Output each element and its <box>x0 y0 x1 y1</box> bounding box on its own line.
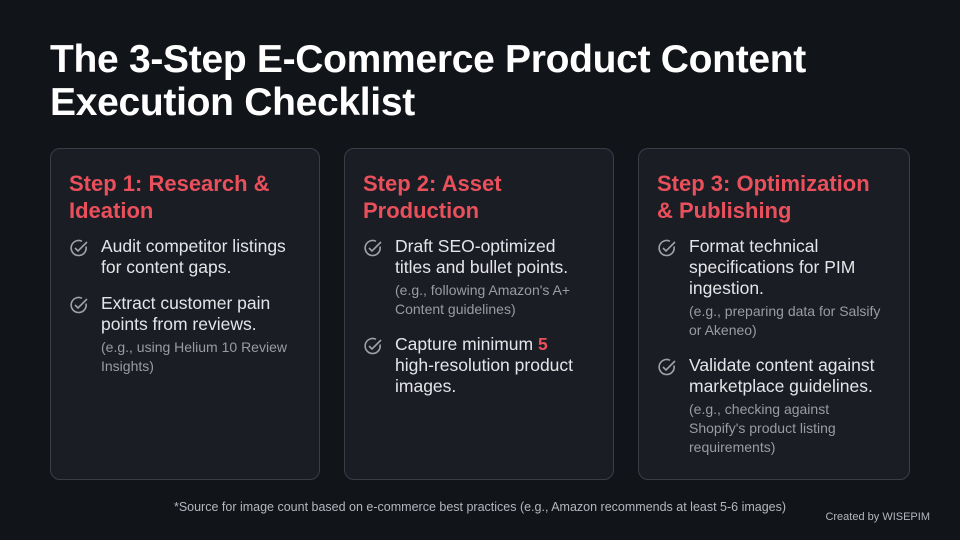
item: draft: (e.g., following Amazon's A+ Content guidelines) <box>395 282 570 317</box>
heading: step 2: Step 2: Asset <box>363 171 502 196</box>
item: extract: (e.g., using Helium 10 Review Insights) <box>101 339 287 374</box>
item: capture <box>364 334 573 396</box>
item: audit: Audit competitor listings for content gaps. <box>101 236 286 277</box>
heading: step 2: Production <box>363 198 479 223</box>
item: validate: Shopify's product listing requirements) <box>689 420 836 455</box>
item: format: Format technical specifications for PIM ingestion. <box>689 236 855 298</box>
heading: step 1: Ideation <box>69 198 153 223</box>
title: The 3-Step E-Commerce Product Content <box>50 38 806 81</box>
item: validate <box>658 355 875 455</box>
heading: step 3 <box>657 171 870 223</box>
item: draft: Draft SEO-optimized <box>395 236 555 256</box>
heading: step 3: & Publishing <box>657 198 791 223</box>
heading: step 2 <box>363 171 502 223</box>
title: Execution Checklist <box>50 81 415 124</box>
item: format: (e.g., preparing data for Salsify or Akeneo) <box>689 303 880 338</box>
item: extract: Extract customer pain points from reviews. <box>101 293 270 334</box>
panel: step 1 <box>50 148 320 480</box>
heading: step 1 <box>69 171 270 223</box>
item: draft <box>364 236 570 317</box>
item: format <box>658 236 880 338</box>
item: draft: titles and bullet points. <box>395 257 568 277</box>
credit: Created by WISEPIM <box>825 511 930 523</box>
panel: step 3 <box>638 148 910 480</box>
heading: step 1: Step 1: Research & <box>69 171 270 196</box>
title <box>50 38 806 124</box>
item: capture: high‑resolution product images. <box>395 355 573 396</box>
item: extract <box>70 293 287 374</box>
item: capture: Capture minimum 5 <box>395 334 548 354</box>
heading: step 3: Step 3: Optimization <box>657 171 870 196</box>
item: validate: (e.g., checking against <box>689 401 829 417</box>
item: validate: Validate content against marketplace guidelines. <box>689 355 875 396</box>
footnote: *Source for image count based on e-commerce best practices (e.g., Amazon recommends at least 5-6 images) <box>174 500 786 514</box>
panel: step 2 <box>344 148 614 480</box>
